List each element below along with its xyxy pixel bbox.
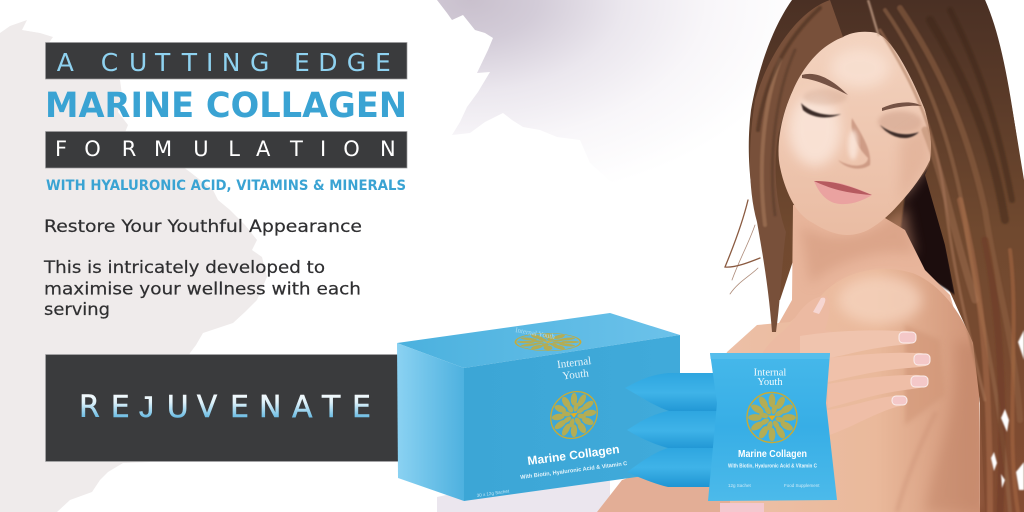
right eye lashes [880, 125, 919, 138]
pink fabric [720, 503, 764, 512]
rejuvenate banner [46, 354, 402, 462]
upper arm fold [897, 412, 936, 512]
right eye socket shading [878, 111, 922, 133]
box top label: Internal Youth [515, 326, 556, 341]
shadow beside fingers [905, 325, 945, 425]
box logo [551, 389, 597, 441]
box top [397, 313, 680, 368]
nails [892, 332, 930, 405]
hair strands [758, 8, 1020, 512]
box sub line: With Biotin, Hyaluronic Acid & Vitamin C [520, 461, 628, 481]
nose shadow [838, 118, 870, 169]
left hair lock [750, 0, 843, 332]
dark hair behind neck [900, 160, 955, 295]
part line [868, 0, 879, 36]
hair wisps [725, 200, 760, 294]
face highlight [789, 94, 841, 166]
hair back [749, 0, 1024, 512]
ring finger [828, 375, 928, 408]
sachet sub line: With Biotin, Hyaluronic Acid & Vitamin C [728, 464, 817, 470]
back of hand and thumb [763, 296, 844, 450]
forearm under box [597, 474, 730, 512]
lips [814, 181, 872, 204]
box brand: Youth [562, 367, 590, 383]
sachet brand: Youth [757, 377, 783, 388]
little finger [827, 395, 907, 436]
text block: restore: Restore Your Youthful Appearance [44, 217, 362, 236]
lavender brush stroke [437, 0, 1024, 280]
text block: description: maximise your wellness with each [44, 280, 361, 298]
title bar: formulation [46, 132, 407, 168]
heading: marine collagen: MARINE COLLAGEN [45, 86, 407, 126]
right cheek shade [900, 120, 931, 203]
left grey brush stroke [0, 20, 267, 512]
loose sachets [625, 373, 722, 487]
thumb nail [813, 298, 825, 314]
title bar: formulation: FORMULATION [55, 137, 396, 161]
eye socket shading [803, 89, 847, 105]
sachet size: 12g Sachet [728, 483, 752, 488]
gaps in the curls [991, 330, 1024, 490]
sachet logo [747, 392, 797, 442]
box product name: Marine Collagen [527, 442, 620, 468]
title bar: a cutting edge: A CUTTING EDGE [57, 48, 391, 77]
box front [464, 335, 680, 501]
sachet brand [754, 368, 786, 388]
box left side [397, 343, 464, 501]
body, shoulder and upper arm [720, 269, 980, 512]
nose highlight [848, 130, 858, 160]
lavender patch under box [437, 470, 610, 512]
box brand: Internal [556, 355, 592, 371]
neck and chest [775, 205, 960, 340]
forehead highlight [830, 48, 890, 88]
right brow [882, 102, 922, 111]
sachet type: Food Supplement [784, 483, 820, 488]
product box [397, 313, 680, 501]
rejuvenate banner: RE J UVENATE [79, 390, 371, 425]
text block: description: serving [44, 300, 110, 319]
middle finger [828, 353, 930, 382]
neck shadow [800, 205, 915, 285]
arm shading [925, 340, 982, 512]
index finger [800, 330, 916, 358]
face [778, 32, 931, 235]
box top logo [516, 333, 580, 351]
front sachet [708, 353, 837, 501]
sachet brand: Internal [754, 368, 786, 378]
sachet product name: Marine Collagen [738, 448, 807, 460]
subheading: WITH HYALURONIC ACID, VITAMINS & MINERALS [46, 178, 406, 194]
box brand [556, 355, 593, 383]
upper right hair mass [877, 0, 1024, 512]
left eye lashes [801, 103, 841, 117]
left brow [802, 74, 848, 95]
text block: description [43, 258, 361, 319]
woman photo illustration [597, 0, 1024, 512]
hand [763, 296, 945, 450]
box sachet count: 30 x 12g Sachet [476, 488, 510, 498]
text block: description: This is intricately developed to [43, 258, 325, 277]
lip line [814, 181, 872, 195]
shoulder highlight [838, 276, 922, 324]
